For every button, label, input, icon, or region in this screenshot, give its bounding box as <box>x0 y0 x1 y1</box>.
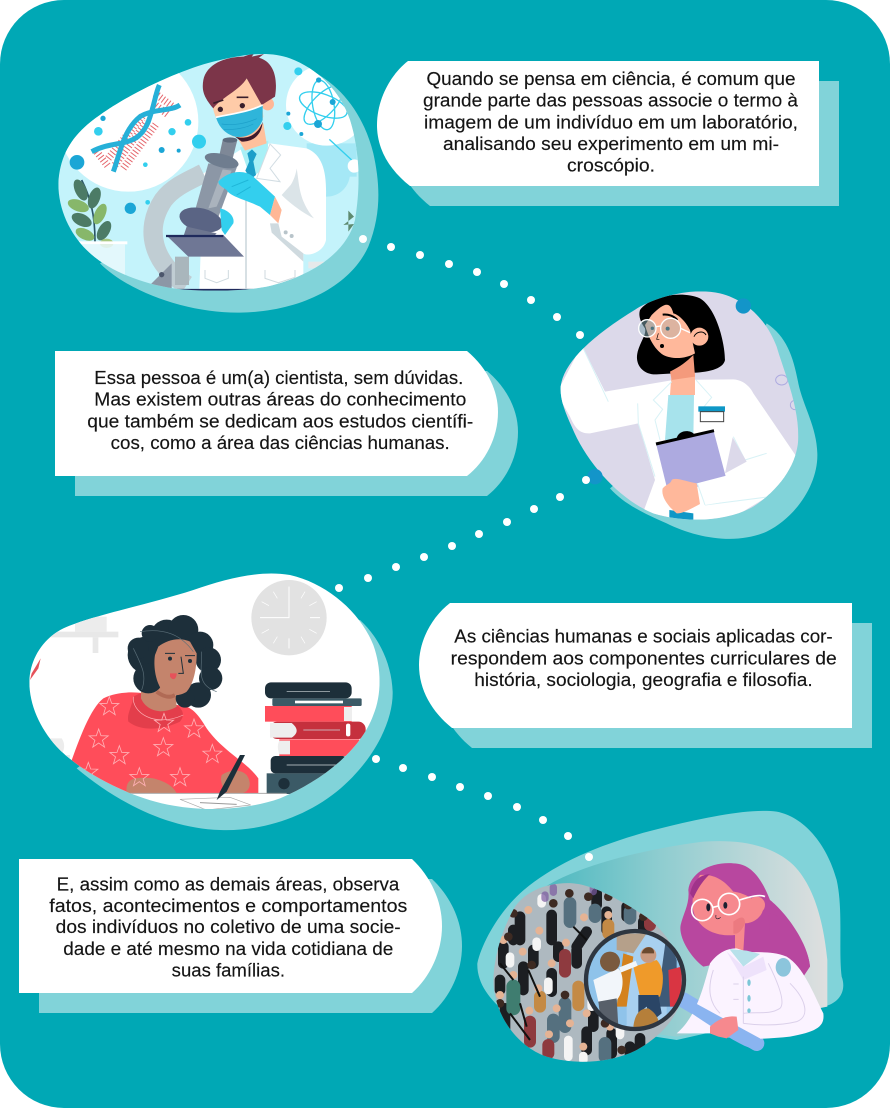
illustration: scientist at microscope <box>58 54 378 313</box>
text panel 4: fatos, acontecimentos e comportamentos <box>49 896 407 916</box>
text panel 3 <box>419 603 872 748</box>
text panel 2: Essa pessoa é um(a) cientista, sem dúvidas. <box>94 368 463 388</box>
illustration: student writing beside books <box>20 565 393 835</box>
woman in lab coat <box>677 863 824 1048</box>
text panel 4: dos indivíduos no coletivo de uma socie- <box>56 917 401 937</box>
text panel 1: Quando se pensa em ciência, é comum que <box>426 69 796 89</box>
text panel 1 <box>377 61 839 206</box>
text panel 4: E, assim como as demais áreas, observa <box>57 874 400 894</box>
dotted connector: student to crowd <box>372 755 593 861</box>
text panel 1: analisando seu experimento em um mi- <box>443 134 779 154</box>
text panel 2 <box>55 351 518 496</box>
text panel 2: que também se dedicam aos estudos científi- <box>87 411 473 431</box>
illustration: woman examining crowd with magnifier <box>470 811 843 1073</box>
illustration: female scientist with clipboard <box>560 291 818 539</box>
text panel 2: cos, como a área das ciências humanas. <box>111 433 450 453</box>
text panel 1: croscópio. <box>567 156 655 176</box>
text panel 4 <box>19 859 462 1013</box>
dotted connector: scientist to student <box>335 476 590 592</box>
text panel 4: suas famílias. <box>172 961 285 981</box>
text panel 1: grande parte das pessoas associe o termo à <box>423 91 799 111</box>
magnifying glass <box>586 930 757 1043</box>
text panel 4: dade e até mesmo na vida cotidiana de <box>63 939 393 959</box>
text panel 2: Mas existem outras áreas do conhecimento <box>94 390 466 410</box>
dotted connector: microscope to scientist <box>359 235 584 339</box>
text panel 1: imagem de um indivíduo em um laboratório, <box>424 112 798 132</box>
text panel 3: história, sociologia, geografia e filosofia. <box>474 670 813 690</box>
text panel 3: respondem aos componentes curriculares de <box>451 648 837 668</box>
text panel 3: As ciências humanas e sociais aplicadas cor- <box>454 627 833 647</box>
crowd blob <box>494 883 679 1062</box>
